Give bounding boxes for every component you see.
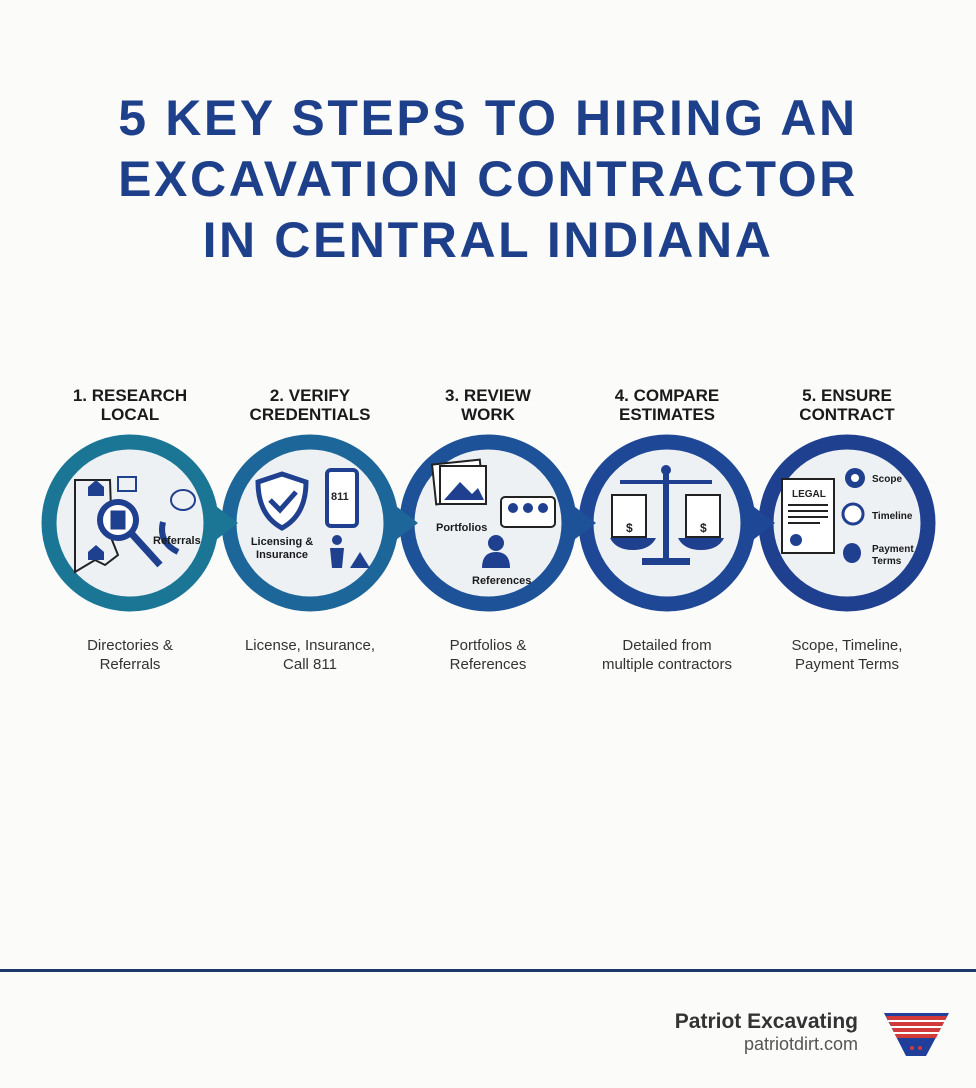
icon: worker: [332, 535, 342, 545]
heading 1: LOCAL: [101, 405, 159, 424]
heading 5: 5. ENSURE: [802, 386, 892, 405]
footer brand text: [675, 1010, 858, 1054]
title: EXCAVATION CONTRACTOR: [118, 151, 858, 207]
footer divider: [0, 969, 976, 972]
desc 1: Directories &: [87, 637, 173, 654]
circle 3: References: [472, 575, 531, 587]
desc 3: Portfolios &: [450, 637, 526, 654]
desc 5: Scope, Timeline,: [792, 637, 902, 654]
circle 4: [586, 442, 748, 604]
circle 2: Insurance: [256, 549, 308, 561]
desc 2: License, Insurance,: [245, 637, 375, 654]
circle 2: [229, 442, 391, 604]
heading 3: 3. REVIEW: [445, 386, 531, 405]
icon: shield: [258, 474, 306, 528]
desc 4: multiple contractors: [602, 656, 732, 673]
desc 3: [450, 637, 526, 673]
desc 1: [87, 637, 173, 673]
icon: gear, clock, money: [845, 468, 865, 488]
heading 1: 1. RESEARCH: [73, 386, 187, 405]
desc 1: Referrals: [100, 656, 160, 673]
circle 1: Referrals: [153, 535, 201, 547]
circle 5: Timeline: [872, 511, 913, 522]
title: [118, 90, 858, 268]
desc 5: Payment Terms: [795, 656, 899, 673]
circle 1: [49, 442, 211, 604]
heading 4: ESTIMATES: [619, 405, 715, 424]
circle 3: Portfolios: [436, 522, 487, 534]
icon: photos: [432, 460, 484, 504]
heading 3: [445, 386, 531, 424]
circle 5: LEGAL: [792, 489, 826, 500]
circle 2: 811: [331, 491, 349, 503]
heading 1: [73, 386, 187, 424]
circle 4: $: [626, 521, 633, 535]
footer brand text: patriotdirt.com: [744, 1034, 858, 1054]
heading 3: WORK: [461, 405, 515, 424]
heading 5: CONTRACT: [799, 405, 895, 424]
icon: phone 811: [327, 470, 357, 526]
step descriptions: [87, 637, 902, 673]
circle 5: Payment: [872, 544, 914, 555]
heading 4: [615, 386, 719, 424]
title: IN CENTRAL INDIANA: [203, 212, 773, 268]
icon: scales: [610, 465, 724, 565]
circle 3: [407, 442, 569, 604]
heading 2: 2. VERIFY: [270, 386, 350, 405]
arrows between circles: [208, 500, 775, 546]
icon: indiana map with magnifier: [75, 477, 195, 572]
title: 5 KEY STEPS TO HIRING AN: [118, 90, 858, 146]
icon: legal document: [782, 479, 834, 553]
circle 5: [766, 442, 928, 604]
desc 5: [792, 637, 902, 673]
circle 5: Scope: [872, 474, 902, 485]
icon: speech bubble: [501, 497, 555, 527]
desc 2: Call 811: [283, 656, 337, 673]
desc 4: [602, 637, 732, 673]
heading 2: [250, 386, 370, 424]
desc 3: References: [450, 656, 526, 673]
footer brand text: Patriot Excavating: [675, 1010, 858, 1033]
desc 4: Detailed from: [622, 637, 712, 654]
heading 2: CREDENTIALS: [250, 405, 370, 424]
step headings: [73, 386, 895, 424]
circle 2: Licensing &: [251, 536, 313, 548]
heading 4: 4. COMPARE: [615, 386, 719, 405]
logo: [884, 1013, 949, 1056]
circle 4: $: [700, 521, 707, 535]
desc 2: [245, 637, 375, 673]
heading 5: [799, 386, 895, 424]
circle 5: Terms: [872, 556, 902, 567]
